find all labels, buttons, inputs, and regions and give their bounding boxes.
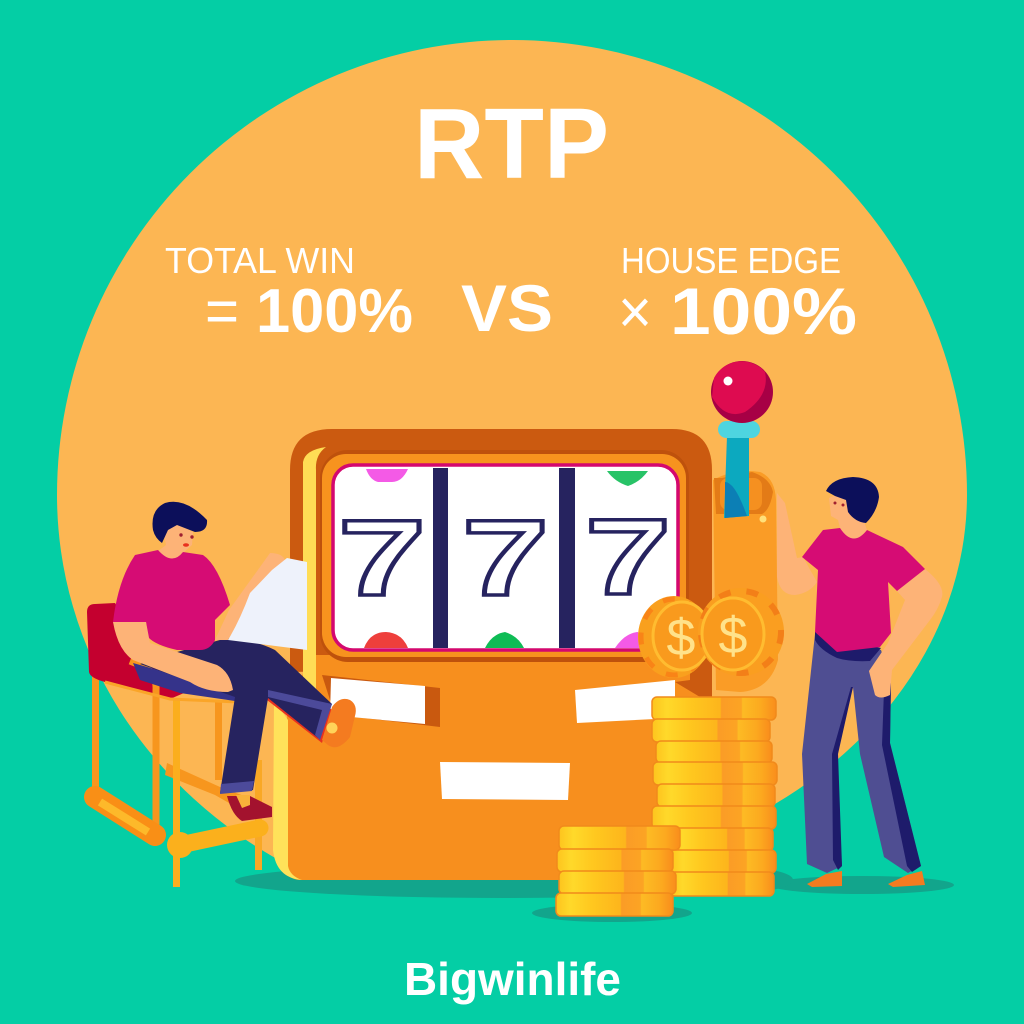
back foot bar	[165, 763, 255, 815]
seat	[87, 603, 184, 699]
formula left: total win	[165, 240, 413, 346]
machine lower body	[287, 655, 700, 880]
formula right: house edge: ×	[618, 278, 652, 347]
machine head frame	[290, 429, 712, 697]
stool legs	[92, 675, 262, 870]
hanging foot	[227, 796, 272, 821]
front legs and arm rest	[130, 661, 156, 832]
coin stack front	[556, 826, 680, 916]
falling coin left: $	[667, 609, 696, 667]
lucky sevens: 7	[462, 497, 549, 618]
stool	[87, 603, 262, 887]
lucky sevens: 7	[585, 496, 671, 617]
lever stem	[724, 436, 749, 518]
foot bars	[95, 797, 155, 835]
machine label plates	[322, 675, 675, 800]
upper yellow edge	[303, 447, 326, 700]
falling coin right	[698, 588, 784, 676]
formula right: house edge: 100%	[670, 274, 857, 348]
shirt	[113, 550, 230, 650]
raised arm	[777, 493, 817, 595]
lever collar	[718, 421, 760, 438]
coin stack right	[652, 697, 777, 896]
title: RTP: RTP	[414, 88, 609, 200]
hand on hip arm	[869, 569, 942, 698]
belt line	[815, 632, 881, 661]
orange circle backdrop	[57, 40, 967, 866]
document	[228, 558, 307, 650]
lucky sevens: 7	[338, 497, 426, 618]
trousers	[140, 638, 332, 793]
falling coin right: $	[719, 607, 748, 665]
shirt	[802, 528, 925, 652]
formula left: total win: 100%	[256, 277, 413, 346]
trouser shading	[832, 682, 921, 872]
ground shadows	[235, 864, 954, 922]
shoes	[807, 871, 925, 887]
lucky sevens	[338, 496, 671, 618]
arm	[113, 622, 233, 692]
screen bezel	[320, 450, 689, 662]
formula left: total win: =	[205, 277, 239, 346]
machine left yellow edge	[273, 700, 302, 880]
eyes and mouth	[179, 533, 194, 547]
hair	[826, 477, 879, 523]
hair	[152, 502, 207, 543]
neck and face	[829, 490, 867, 540]
eyes and mouth	[834, 502, 844, 506]
trouser cuffs	[220, 690, 332, 794]
formula right: house edge: HOUSE EDGE	[621, 240, 841, 281]
reel symbol fragments	[364, 469, 648, 648]
lever ball	[711, 361, 773, 423]
formula right: house edge	[618, 240, 857, 348]
trousers	[802, 634, 921, 873]
foot on machine	[322, 699, 356, 747]
person standing at lever	[777, 477, 942, 887]
slot machine	[273, 429, 712, 880]
neck and face	[158, 524, 193, 559]
lever housing	[713, 471, 778, 692]
versus label: VS	[461, 271, 553, 345]
formula left: total win: TOTAL WIN	[165, 240, 355, 281]
reel dividers	[433, 468, 575, 648]
falling coin left	[638, 596, 711, 678]
person seated on stool	[87, 502, 356, 887]
far leg stripe	[133, 663, 235, 701]
reels screen	[333, 465, 678, 650]
lever	[711, 361, 778, 692]
forearm and hand	[215, 553, 285, 640]
brand name: Bigwinlife	[404, 953, 621, 1005]
